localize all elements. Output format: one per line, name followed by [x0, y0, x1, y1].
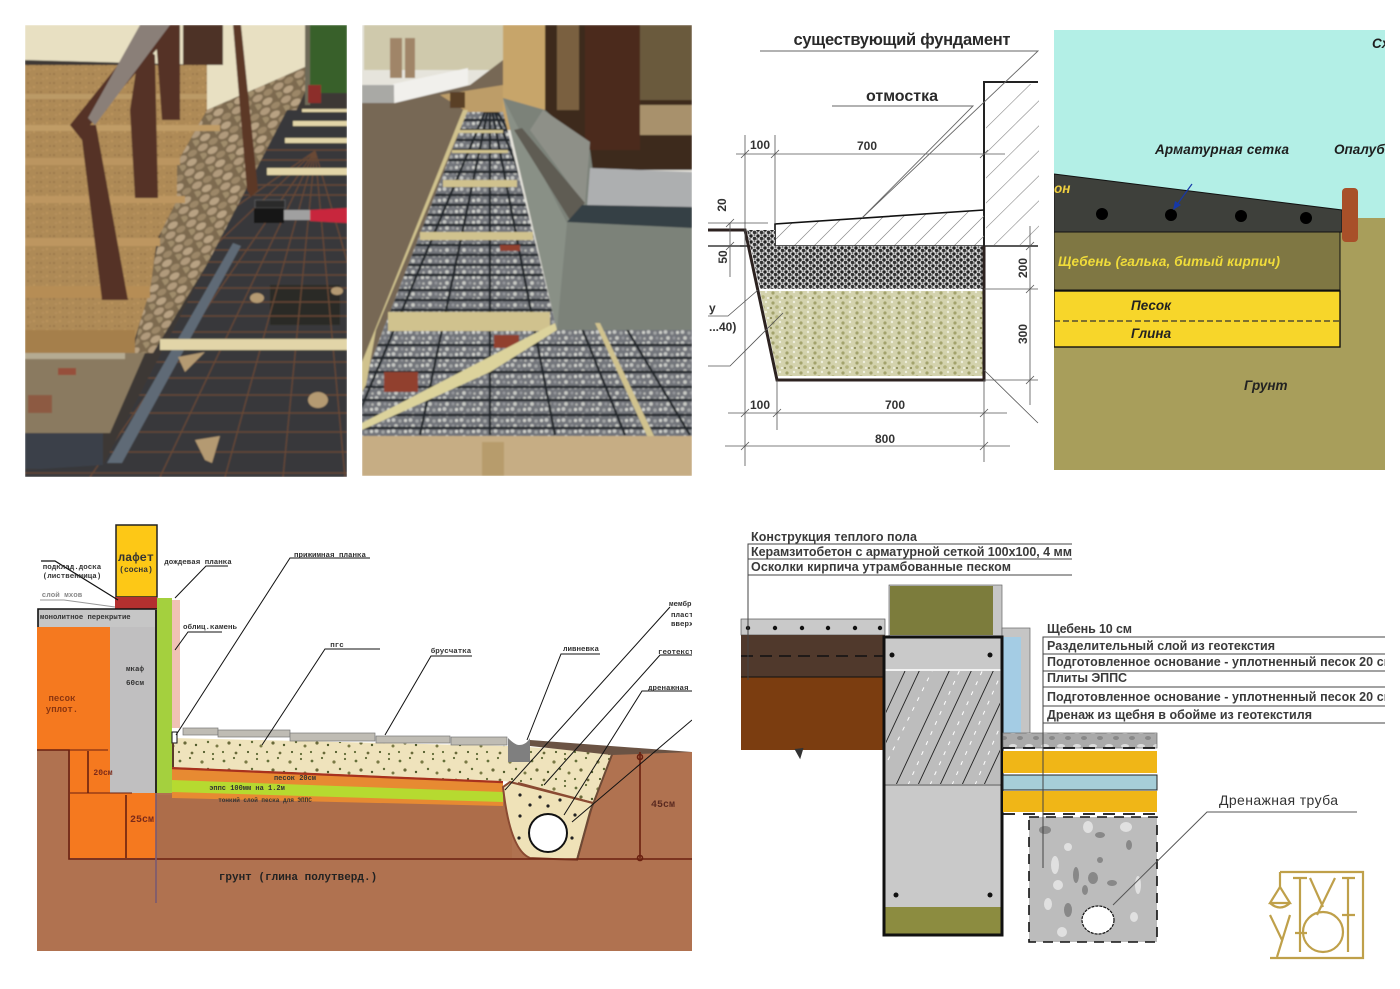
section: labels: пласт	[671, 612, 694, 620]
section: base and dimension lines	[37, 750, 692, 903]
right table of paving layers: Плиты ЭППС	[1047, 671, 1127, 685]
section: bearing beam	[116, 525, 157, 597]
section: labels: ливневка	[563, 646, 599, 654]
section: labels: 60см	[126, 680, 144, 688]
label: existing foundation	[760, 31, 1038, 218]
gravel drain	[1029, 817, 1157, 942]
section: labels: прижимная планка	[294, 552, 367, 560]
section: labels: 20см	[93, 769, 113, 778]
photo 1: stone plinth	[133, 67, 305, 353]
section: labels: 25см	[130, 815, 154, 826]
floor layers	[741, 619, 885, 758]
section: existing foundation hatch	[983, 81, 1039, 246]
dimension numbers: ...40)	[709, 320, 736, 334]
panel: photo of stairs and reinforcement mesh along wall	[25, 25, 347, 477]
dimension numbers: 300	[1016, 324, 1030, 344]
label: drain pipe: Дренажная труба	[1219, 792, 1338, 808]
section: labels: (лиственница)	[43, 573, 101, 581]
top table of floor layers	[748, 530, 1072, 680]
diagram: sand and clay layers	[1054, 291, 1340, 347]
photo 2: concrete plinth	[503, 98, 692, 330]
section: concrete slab	[708, 209, 1038, 247]
section: labels: 45см	[651, 800, 675, 811]
photo 1: green bush	[310, 25, 347, 93]
drain pipe	[1082, 906, 1114, 934]
panel: colored layer diagram of reinforced slab	[1054, 30, 1400, 470]
diagram: labels	[1054, 36, 1400, 393]
diagram: labels: Песок	[1131, 298, 1172, 313]
panel: warm floor and drainage cross-section	[741, 530, 1393, 942]
photo 1: granite steps	[25, 65, 220, 354]
section: bearing beam: (сосна)	[119, 566, 153, 575]
diagram: sky	[1054, 30, 1385, 225]
section: surface slope	[530, 740, 692, 755]
section: labels: грунт (глина полутверд.)	[219, 872, 377, 884]
section: labels: мембр	[669, 600, 692, 609]
photo 2: soil	[362, 60, 503, 385]
photo 1: rubble base	[25, 353, 145, 433]
section: ground	[37, 750, 692, 951]
section: insulation green	[157, 598, 172, 793]
photo 2: dark timber porch	[545, 25, 692, 170]
photo 2: log wall	[503, 25, 545, 130]
photo 2: bricks	[384, 245, 520, 392]
section: monolithic slab	[38, 609, 157, 627]
right table of paving layers: Дренаж из щебня в обойме из геотекстиля	[1047, 708, 1312, 722]
photo 2: gravel and rebar in formwork	[350, 100, 692, 440]
section: layers under paving	[172, 768, 503, 806]
photo 1: red bucket	[308, 85, 321, 103]
photo 1: hose and grate	[254, 200, 347, 223]
diagram: labels: Глина	[1131, 326, 1172, 341]
right table of paving layers: Разделительный слой из геотекстия	[1047, 639, 1275, 653]
diagram: formwork	[1342, 188, 1358, 242]
section: labels: дренажная	[648, 685, 689, 693]
dimension numbers: 100	[750, 398, 770, 412]
section: sand layer	[760, 291, 984, 376]
section: labels: облиц.камень	[183, 623, 238, 632]
panel: section with drainage pipe and paving	[37, 525, 695, 951]
dimension numbers: 20	[715, 198, 729, 212]
foundation block	[880, 637, 1040, 935]
photo 1: stones on mesh	[178, 287, 343, 463]
top table of floor layers: Конструкция теплого пола	[751, 530, 918, 544]
section: gutter	[508, 738, 530, 762]
section: drainage trench	[503, 752, 613, 860]
diagram: labels: Грунт	[1244, 378, 1288, 393]
diagram: concrete slab with rebar	[1054, 174, 1342, 232]
right table of paving layers: Подготовленное основание - уплотненный песок 20 см	[1047, 690, 1393, 704]
label: existing foundation: существующий фундамент	[794, 31, 1010, 49]
section: drain pipe	[529, 814, 567, 852]
section: edge clip	[172, 732, 177, 743]
section: labels: подклад.доска	[43, 564, 102, 572]
diagram: labels: он	[1054, 181, 1070, 196]
top table of floor layers: Осколки кирпича утрамбованные песком	[751, 560, 1011, 574]
panel: photo of formwork with rebar and gravel	[350, 25, 692, 476]
side insulation	[1002, 628, 1030, 748]
section: labels: эппс 100мм на 1.2м	[209, 785, 285, 793]
wall top block	[889, 585, 1002, 636]
section: labels: дождевая планка	[164, 559, 232, 567]
section: larch board	[115, 597, 157, 609]
diagram: ground	[1054, 218, 1385, 470]
section: labels: уплот.	[46, 705, 78, 715]
section: labels: мкаф	[126, 666, 144, 674]
section: labels: песок 20см	[274, 775, 316, 783]
diagram: labels: Опалубка	[1334, 142, 1400, 157]
photo 1: wooden battens	[160, 109, 347, 350]
section: labels: пгс	[330, 642, 344, 650]
section: labels: монолитное перекрытие	[40, 614, 131, 622]
dimension numbers: 200	[1016, 258, 1030, 278]
dimension numbers: 700	[885, 398, 905, 412]
dimension numbers	[709, 138, 1030, 446]
label: blind area: отмостка	[866, 88, 938, 105]
photo 1: downpipe	[233, 25, 258, 197]
outer pavement layers	[1003, 733, 1157, 814]
photo 1: membrane strip	[107, 243, 241, 463]
dimension lines	[708, 135, 1038, 466]
section: paving stones	[183, 728, 507, 745]
section: crushed stone layer	[747, 230, 984, 289]
photo 1: handrail and posts	[70, 25, 223, 300]
section: labels: песок	[48, 694, 76, 704]
section: labels: брусчатка	[431, 647, 472, 656]
label: blind area	[832, 88, 973, 218]
photo 2: wooden formwork boards	[362, 110, 655, 438]
photo 1: ground behind	[305, 25, 310, 105]
right table of paving layers: Подготовленное основание - уплотненный песок 20 см	[1047, 655, 1393, 669]
section: strip foundation	[110, 627, 155, 793]
photo 1: plastered wall	[25, 25, 305, 110]
right table of paving layers: Щебень 10 см	[1047, 622, 1132, 636]
section: sand and gravel fill	[173, 738, 613, 803]
dimension numbers: 800	[875, 432, 895, 446]
photo 2: wooden box	[450, 92, 465, 108]
diagram: labels: Щебень (галька, битый кирпич)	[1058, 254, 1280, 269]
logo: gold lamp emblem	[1270, 872, 1363, 958]
section: labels: тонкий слой песка для ЭППС	[218, 797, 312, 804]
diagram: labels: Арматурная сетка	[1154, 142, 1289, 157]
section: labels: вверх	[671, 621, 694, 629]
photo 1: dark base	[25, 433, 103, 469]
section: stone facing	[172, 600, 180, 728]
section: bearing beam: лафет	[118, 551, 154, 565]
diagram: arrow to mesh	[1173, 184, 1192, 210]
section: outline of excavation	[708, 230, 984, 380]
dimension numbers: у	[709, 301, 716, 315]
section: leader lines	[40, 558, 692, 822]
section: labels	[40, 552, 695, 884]
section: labels: слой мхов	[42, 591, 83, 600]
section: compacted sand	[37, 627, 110, 750]
panel: section drawing of blind area with dimensions	[708, 31, 1060, 466]
right table of paving layers	[1043, 622, 1393, 868]
top table of floor layers: Керамзитобетон с арматурной сеткой 100х100, 4 мм	[751, 545, 1072, 559]
section: labels: геотекст	[658, 649, 695, 657]
dimension numbers: 50	[716, 250, 730, 264]
photo 2: front board	[362, 436, 692, 476]
photo 2: distant house and fence	[362, 25, 504, 103]
label: drain pipe	[1113, 792, 1357, 905]
dimension numbers: 700	[857, 139, 877, 153]
diagram: rubble layer	[1054, 232, 1340, 290]
photo 1: reinforcement mesh floor	[25, 109, 347, 477]
dimension numbers: 100	[750, 138, 770, 152]
